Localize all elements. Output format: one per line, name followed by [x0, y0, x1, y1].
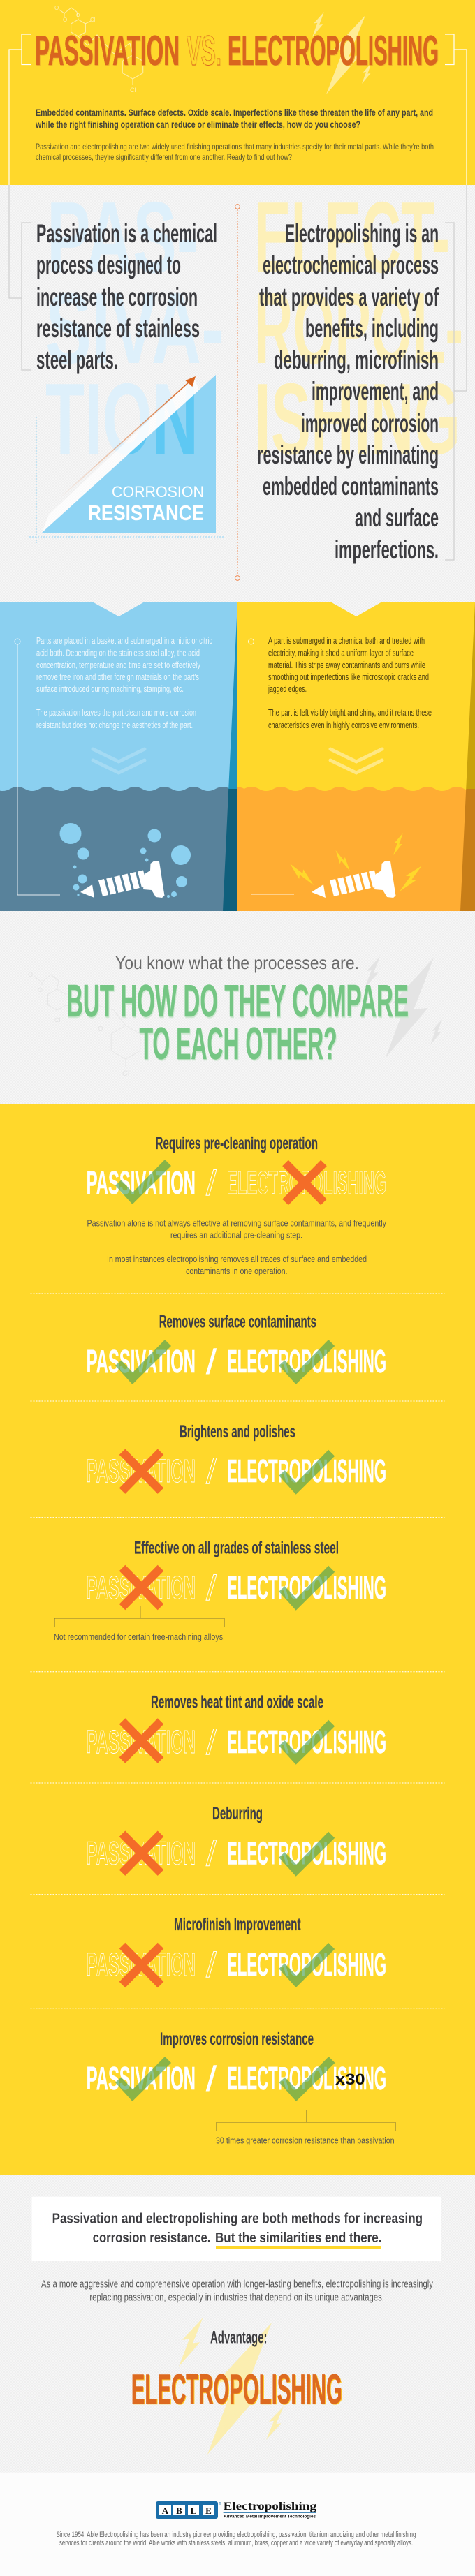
text block: passivation steps: concentration, temperature and time are set to effectively: [36, 660, 201, 670]
icon: gray molecule: O: [38, 986, 43, 993]
text block: passivation definition: increase the corrosion: [36, 283, 198, 311]
water: [0, 787, 244, 911]
text block: electropolishing steps: [268, 636, 432, 730]
callout: machining alloys: Not recommended for certain free-machining alloys.: [54, 1631, 225, 1642]
callout box: But the similarities end there.: [215, 2230, 381, 2246]
text block: passivation definition: [36, 219, 217, 374]
row: removes surface contaminants: [87, 1312, 386, 1384]
intro paragraph: [36, 142, 434, 162]
icon: gray molecule: O: [98, 1026, 103, 1033]
icon: molecule: Cl: [90, 17, 96, 23]
row: heat tint and oxide scale: Removes heat tint and oxide scale: [151, 1693, 323, 1712]
row: microfinish improvement: /: [206, 1946, 217, 1985]
panel: definitions: [9, 181, 467, 580]
watermark: electropolishing: [254, 181, 463, 475]
title: PASSIVATION: [35, 27, 180, 74]
title: VS.: [187, 27, 221, 74]
row: removes surface contaminants: Removes surface contaminants: [159, 1312, 316, 1332]
row: deburring: /: [206, 1835, 217, 1874]
heading: [66, 975, 409, 1069]
panel: conclusion: [32, 2197, 441, 2464]
row: effective on all grades: PASSIVATION: [87, 1569, 196, 1606]
text block: pre-cleaning note: contaminants in one operation.: [186, 1266, 288, 1276]
intro lead text: while the right finishing operation can reduce or eliminate their effects, how do you choose?: [35, 119, 360, 130]
icon: molecule: [54, 5, 143, 94]
row: improves corrosion resistance: /: [206, 2059, 217, 2098]
logo: able electropolishing: Electropolishing: [224, 2501, 316, 2512]
icon: screw: [312, 861, 395, 898]
row: deburring: Deburring: [212, 1804, 263, 1823]
title bracket lines: [9, 34, 467, 185]
text block: passivation steps: surface introduced during machining, stamping, etc.: [36, 684, 184, 694]
icon: molecule: Cl: [130, 87, 136, 94]
text block: passivation definition: Passivation is a chemical: [36, 219, 217, 248]
logo: able electropolishing: E: [205, 2505, 212, 2516]
text block: passivation steps: [36, 636, 212, 730]
text block: pre-cleaning note: [87, 1218, 386, 1276]
water: [238, 787, 475, 911]
text block: passivation steps: The passivation leaves the part clean and more corrosion: [36, 708, 196, 718]
row: effective on all grades: Effective on all grades of stainless steel: [134, 1539, 339, 1558]
text block: electropolishing definition: [257, 219, 439, 564]
row: microfinish improvement: PASSIVATION: [87, 1946, 196, 1983]
logo: able electropolishing: B: [176, 2505, 182, 2516]
row: requires pre-cleaning: Requires pre-cleaning operation: [155, 1134, 318, 1153]
row: heat tint and oxide scale: /: [206, 1723, 217, 1762]
icon: screw: [80, 861, 165, 898]
icon: gray molecule: [28, 971, 140, 1078]
text block: pre-cleaning note: Passivation alone is not always effective at removing surface contaminants, and frequently: [87, 1218, 386, 1229]
panel: footer: [0, 2473, 475, 2576]
row: microfinish improvement: [87, 1915, 386, 1987]
text block: passivation definition: resistance of stainless: [36, 314, 200, 343]
row: improves corrosion resistance: Improves corrosion resistance: [160, 2029, 314, 2049]
row: deburring: PASSIVATION: [87, 1835, 196, 1872]
panel: passivation process: [0, 602, 244, 911]
icon: sparks: [286, 831, 426, 895]
icon: chevrons: [330, 749, 382, 773]
intro paragraph: chemical processes, they're significantly different from one another. Ready to find out how?: [36, 152, 292, 162]
icon: molecule: O: [76, 13, 80, 18]
callout box: corrosion resistance.: [93, 2230, 210, 2246]
title: [35, 27, 439, 74]
row: brightens and polishes: PASSIVATION: [87, 1453, 196, 1489]
panel: header: [0, 0, 475, 185]
icon: gray molecule: Cl: [122, 1069, 129, 1078]
row: heat tint and oxide scale: [87, 1693, 386, 1765]
logo: able electropolishing: L: [191, 2505, 197, 2516]
chart: corrosion resistance triangle: CORROSION: [112, 483, 204, 501]
icon: lightning bolts: [308, 9, 377, 100]
logo: able electropolishing: A: [162, 2505, 169, 2516]
text block: electropolishing steps: jagged edges.: [268, 684, 307, 694]
divider: dotted centre line: [235, 205, 240, 580]
text block: pre-cleaning note: requires an additional pre-cleaning step.: [170, 1230, 302, 1241]
panel: compare heading: [28, 950, 448, 1078]
row: heat tint and oxide scale: PASSIVATION: [87, 1724, 196, 1760]
icon: chevrons: [93, 749, 145, 773]
icon: bubbles: [60, 823, 191, 898]
row: improves corrosion resistance: PASSIVATION: [87, 2060, 196, 2096]
text block: passivation steps: acid bath. Depending on the stainless steel alloy, the acid: [36, 648, 200, 658]
text block: about: [57, 2531, 416, 2547]
row: removes surface contaminants: /: [206, 1342, 217, 1382]
chart: corrosion resistance triangle: [29, 362, 225, 543]
icon: molecule: O: [54, 5, 59, 11]
row: effective on all grades: [54, 1539, 386, 1642]
callout: 30 times: [216, 2110, 395, 2146]
watermark: passivation: PAS-: [47, 181, 198, 294]
text block: electropolishing steps: characteristics even in highly corrosive environments.: [268, 720, 419, 730]
row: improves corrosion resistance: x30: [335, 2071, 365, 2088]
panel: electropolishing process: [238, 602, 475, 911]
row: improves corrosion resistance: [87, 2029, 395, 2146]
text block: passivation definition: steel parts.: [36, 346, 118, 374]
logo: able electropolishing: ®: [219, 2501, 221, 2506]
intro lead text: [35, 107, 433, 130]
row: brightens and polishes: Brightens and polishes: [180, 1422, 295, 1442]
chart: corrosion resistance triangle: TION: [45, 362, 198, 475]
panel: comparison table: [0, 1104, 475, 2175]
label: advantage: Advantage:: [210, 2328, 267, 2348]
icon: gray molecule: O: [28, 971, 33, 978]
logo: able electropolishing: Advanced Metal Improvement Technologies: [224, 2515, 316, 2519]
text block: passivation steps: Parts are placed in a basket and submerged in a nitric or citric: [36, 636, 212, 646]
row: requires pre-cleaning: PASSIVATION: [87, 1164, 196, 1201]
row: microfinish improvement: Microfinish Improvement: [174, 1915, 301, 1934]
watermark: passivation: TION: [45, 362, 198, 475]
icon: yellow lightning bolts: [171, 2312, 291, 2464]
callout box: Passivation and electropolishing are both methods for increasing: [52, 2211, 423, 2226]
row: brightens and polishes: [87, 1422, 386, 1495]
watermark: passivation: SIVA-: [45, 272, 224, 385]
text block: passivation steps: remove free iron and other foreign materials on the part's: [36, 672, 199, 682]
icon: gray lightning bolts: [360, 950, 448, 1065]
row: effective on all grades: /: [206, 1569, 217, 1608]
text block: passivation definition: process designed to: [36, 251, 181, 279]
logo: able electropolishing: [156, 2501, 316, 2519]
text block: pre-cleaning note: In most instances electropolishing removes all traces of surface and embedded: [107, 1254, 367, 1264]
callout: 30 times: 30 times greater corrosion resistance than passivation: [216, 2135, 395, 2146]
row: removes surface contaminants: PASSIVATION: [87, 1343, 196, 1379]
text block: summary: replacing passivation, especially in industries that depend on its unique advantages.: [89, 2292, 384, 2304]
text block: summary: [41, 2279, 433, 2304]
timeline line: [15, 639, 60, 895]
text block: electropolishing steps: electricity, making it shed a uniform layer of surface: [268, 648, 414, 658]
text block: passivation steps: resistant but does not change the aesthetics of the part.: [36, 720, 193, 730]
callout box: [32, 2197, 441, 2261]
chart: corrosion resistance triangle: RESISTANCE: [88, 501, 204, 525]
icon: molecule: O: [63, 17, 67, 23]
subheading: You know what the processes are.: [115, 952, 359, 973]
row: brightens and polishes: /: [206, 1452, 217, 1491]
gray bracket lines: [9, 185, 467, 560]
row: deburring: [87, 1804, 386, 1877]
row: requires pre-cleaning: [87, 1134, 386, 1276]
timeline line: [249, 639, 294, 894]
icon: gray molecule: Cl: [54, 1016, 60, 1023]
watermark: passivation: [45, 181, 224, 475]
callout: machining alloys: [54, 1606, 225, 1642]
row: requires pre-cleaning: /: [206, 1164, 217, 1203]
